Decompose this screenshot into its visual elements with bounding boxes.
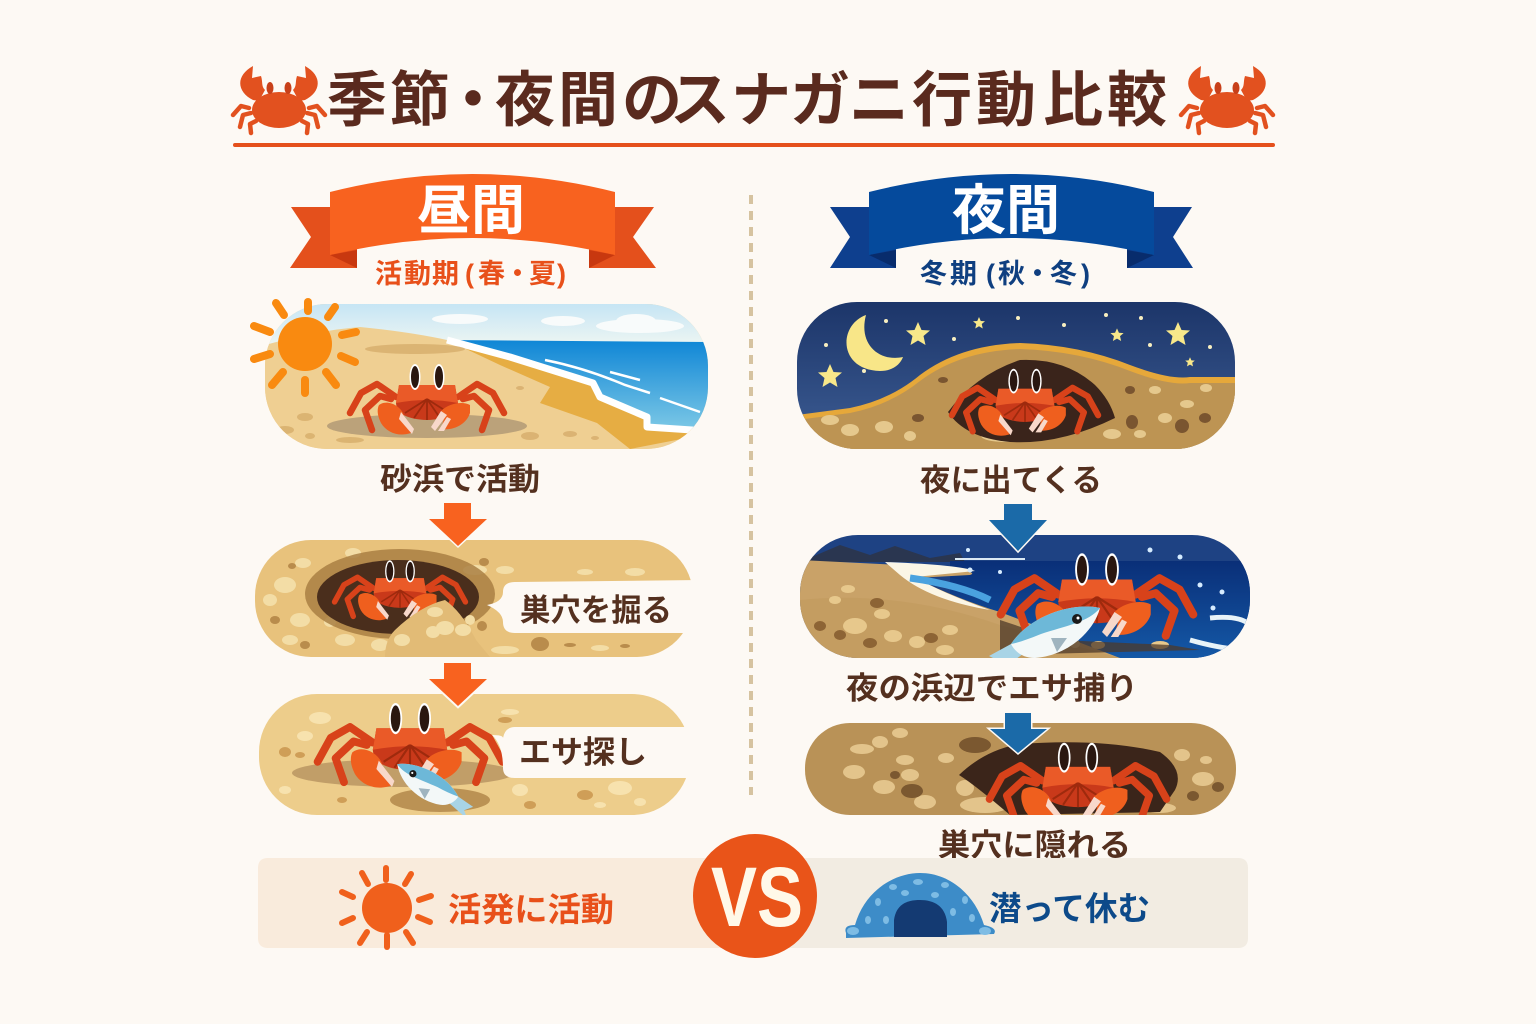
icon: blue burrow dome — [845, 873, 995, 938]
callout: food search — [492, 727, 705, 778]
panel: night burrow — [797, 302, 1235, 449]
panel: beach by day — [265, 304, 708, 449]
arrow: night step 2 — [990, 713, 1047, 753]
title crab right — [1181, 66, 1273, 133]
ribbon: daytime — [290, 174, 656, 268]
title crab left — [233, 66, 325, 133]
subtitle: winter season: 冬期(秋・冬) — [920, 259, 1090, 289]
label: rest underground: 潜って休む — [989, 890, 1150, 927]
label: come out at night: 夜に出てくる — [920, 463, 1102, 498]
panel: digging burrow — [255, 540, 693, 657]
icon: summary sun — [342, 868, 431, 947]
divider — [749, 195, 753, 795]
VS badge — [693, 834, 817, 958]
arrow: day step 1 — [429, 503, 487, 546]
icon: sun — [254, 302, 356, 393]
label: night shore hunting: 夜の浜辺でエサ捕り — [846, 671, 1138, 706]
label: hide in burrow: 巣穴に隠れる — [938, 828, 1131, 863]
panel: summary bar — [258, 858, 1248, 948]
arrow: day step 2 — [429, 663, 487, 706]
panel: searching for food — [259, 694, 690, 820]
title underline — [233, 143, 1275, 147]
subtitle: active season: 活動期(春・夏) — [375, 259, 566, 289]
label: dig burrow: 巣穴を掘る — [520, 593, 672, 628]
arrow: night step 1 — [989, 504, 1047, 551]
ribbon text: daytime: 昼間 — [417, 181, 525, 241]
label: active: 活発に活動 — [448, 891, 614, 928]
panel: night shore — [800, 535, 1250, 658]
callout: digging burrow — [487, 580, 700, 633]
title: 季節・夜間のスナガニ行動比較 — [327, 67, 1167, 134]
ribbon: night — [830, 174, 1193, 268]
stars — [818, 313, 1212, 387]
label: active on beach: 砂浜で活動 — [380, 462, 540, 497]
panel: hiding in burrow — [805, 723, 1236, 824]
label: search for food: エサ探し — [519, 735, 647, 770]
VS text: VS — [711, 850, 803, 944]
icon: crescent moon — [846, 315, 903, 371]
ribbon text: night: 夜間 — [952, 181, 1060, 241]
